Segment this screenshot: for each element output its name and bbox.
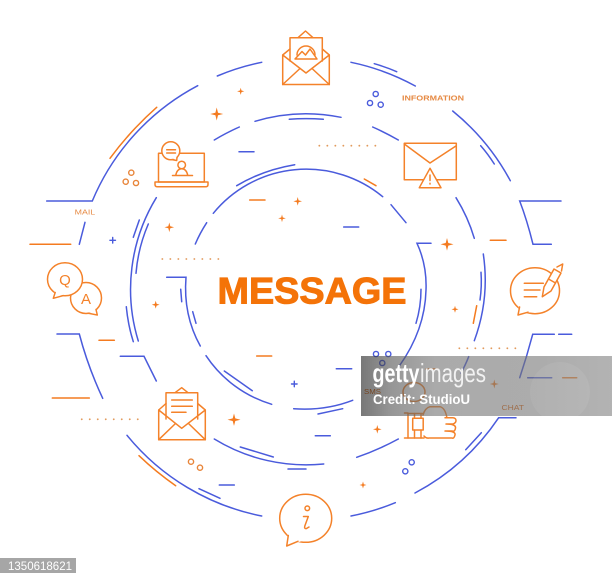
blue dashes — [219, 152, 359, 485]
watermark banner: getty — [372, 358, 420, 388]
label: chat: CHAT — [502, 403, 525, 412]
icon: open envelope with picture — [283, 31, 329, 84]
icon: laptop with person and chat bubble — [155, 142, 208, 187]
icon under watermark: speech bubble — [403, 382, 425, 402]
icon: hand with smartwatch — [404, 407, 456, 438]
blue plus marks — [110, 238, 297, 387]
label: mail: MAIL — [75, 208, 95, 216]
icon: Q and A speech bubbles: A — [81, 291, 91, 308]
icon: information speech bubble — [280, 494, 332, 546]
outer ring — [47, 62, 572, 516]
icon: open envelope with letter — [159, 388, 205, 440]
image id tag — [0, 558, 76, 573]
title: MESSAGE — [218, 270, 406, 311]
icon: Q and A speech bubbles: Q — [59, 272, 71, 289]
icon: speech bubble with pencil — [510, 264, 563, 315]
label: information: INFORMATION — [402, 94, 464, 103]
watermark banner: Credit: StudioU — [373, 391, 470, 407]
inner ring — [167, 165, 431, 414]
watermark banner — [361, 356, 612, 422]
dotted lines — [82, 146, 516, 419]
small circle clusters — [123, 91, 414, 474]
icon: envelope with warning triangle — [404, 143, 456, 188]
watermark banner: images — [420, 358, 486, 388]
orange dashes — [30, 107, 577, 486]
icon: Q and A speech bubbles — [48, 263, 102, 315]
label: sms: SMS — [364, 387, 381, 396]
sparkles — [152, 88, 499, 488]
middle ring — [120, 114, 485, 469]
image id tag: 1350618621 — [8, 561, 72, 573]
